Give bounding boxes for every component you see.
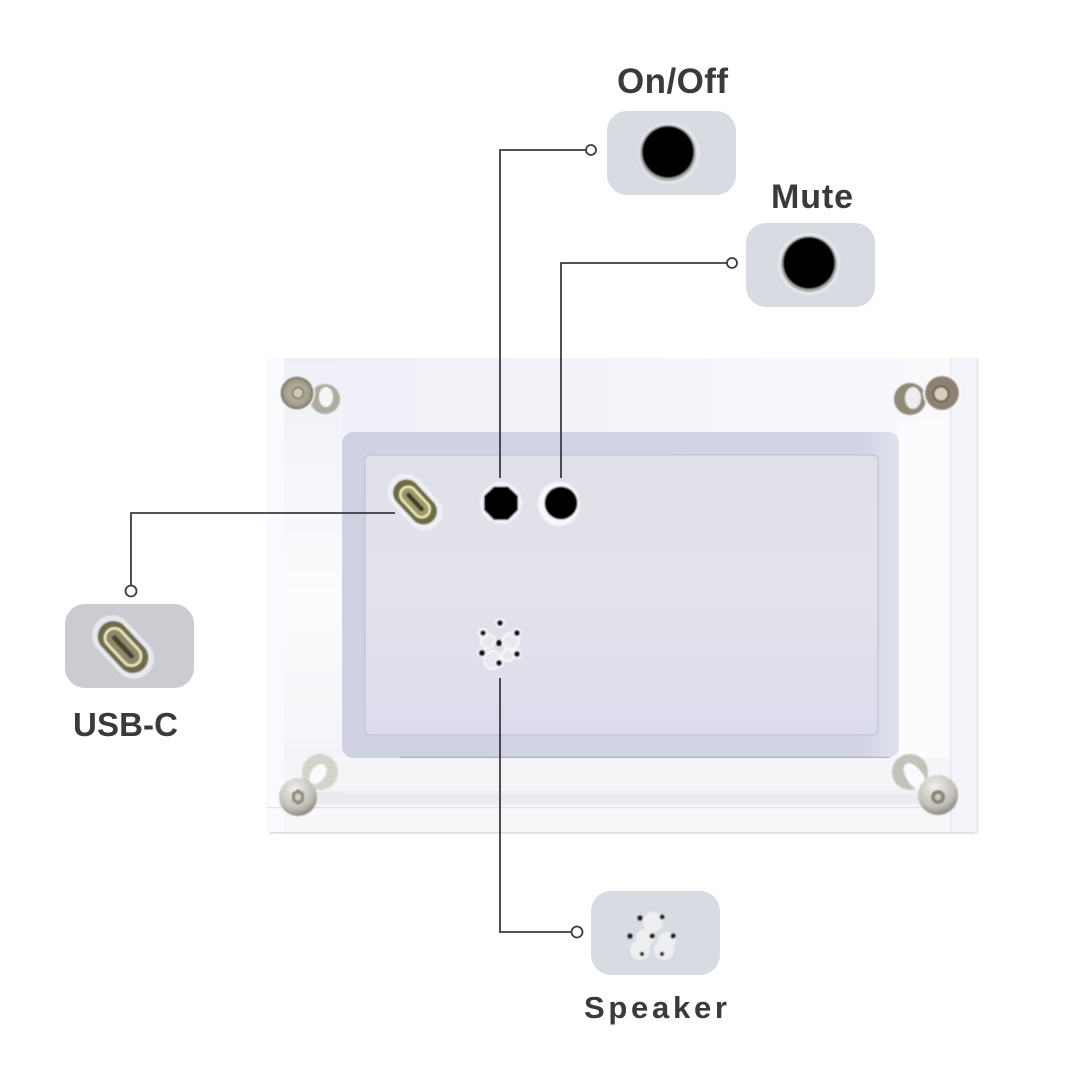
panel: USB-C callout — [65, 604, 194, 688]
icon: top-right screw — [894, 374, 961, 415]
icon: bottom-right screw — [892, 754, 958, 815]
icon: speaker holes — [627, 912, 676, 960]
arrow: speaker leader line — [500, 678, 582, 938]
label: USB-C: USB-C — [73, 706, 178, 743]
icon: mute button hole — [538, 482, 580, 526]
panel: speaker callout — [591, 891, 720, 975]
label: On/Off: On/Off — [617, 62, 728, 101]
arrow: on/off leader line — [500, 145, 596, 478]
icon: USB-C port on frame — [380, 466, 450, 538]
arrow: mute leader line — [561, 258, 737, 478]
arrow: USB-C leader line — [126, 513, 395, 596]
icon: on/off button — [638, 122, 700, 184]
icon: on/off button hole — [480, 482, 522, 524]
panel: rear plate — [342, 432, 899, 758]
panel: mute callout — [746, 223, 875, 307]
label: Speaker: Speaker — [584, 990, 727, 1025]
icon: USB-C port — [84, 607, 162, 687]
label: Mute: Mute — [771, 178, 853, 216]
icon: mute button — [778, 233, 840, 295]
icon: bottom-left screw — [279, 754, 338, 816]
icon: speaker holes on frame — [477, 618, 522, 669]
panel: on/off callout — [607, 111, 736, 195]
icon: top-left screw — [279, 375, 340, 414]
panel: acrylic frame — [266, 358, 979, 835]
